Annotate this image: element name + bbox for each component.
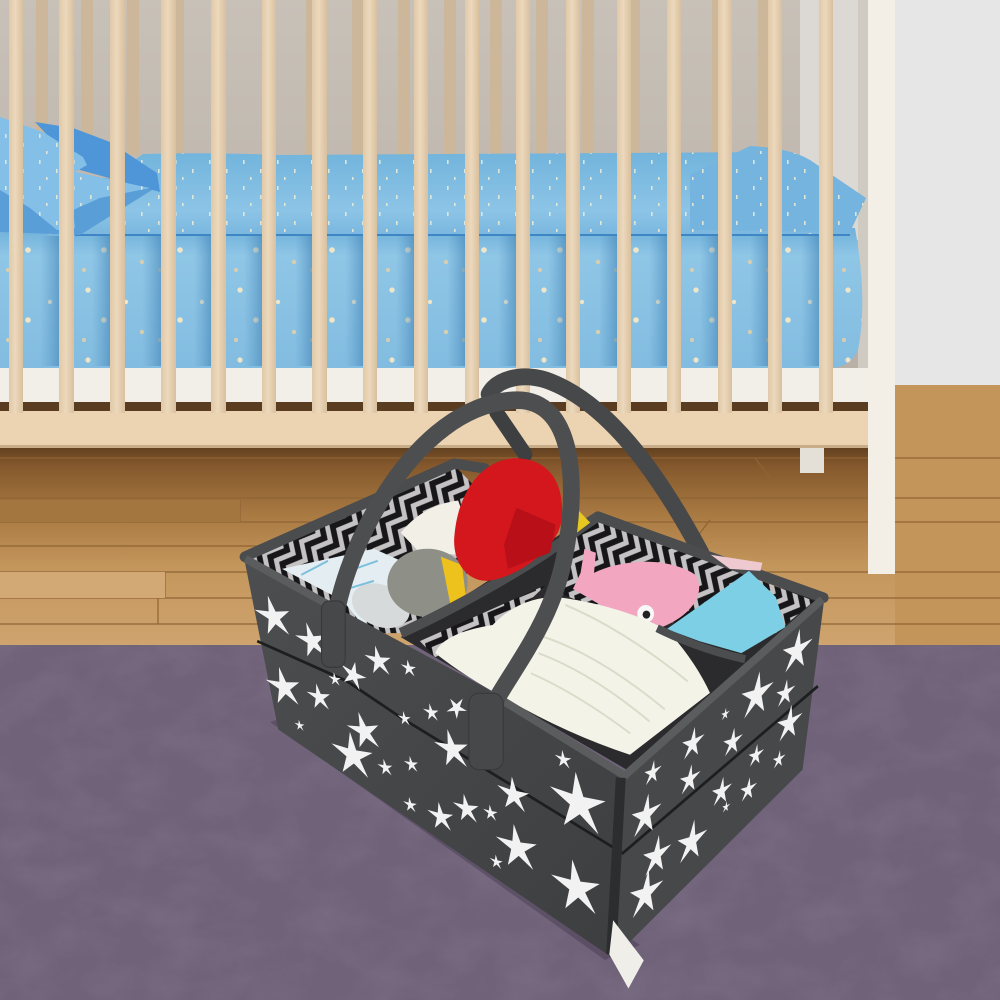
diaper stack [435,597,710,755]
blue wipes package [667,571,785,653]
rolled cloth [401,501,477,557]
pocket seams [257,641,818,853]
rug [0,645,1000,1000]
right face [613,598,824,958]
folded wipes left [282,549,401,625]
wooden floor [0,385,1000,647]
stars left face [250,595,609,916]
hang tag [609,920,644,989]
red plush toy [454,458,590,581]
back handle [489,377,701,553]
storage basket [244,377,824,989]
center divider [401,517,598,633]
front handle [322,400,571,770]
background wall [0,0,1000,460]
pink box behind [711,555,762,571]
mattress fold shadows [40,236,819,366]
pink plush toy [573,549,699,629]
partial star beside handle foot [443,692,471,721]
crib end panel [800,0,895,574]
crib rails [0,368,868,448]
rim back [245,464,824,598]
basket interior lining [250,465,820,770]
left face [244,557,625,958]
crib back bars [36,0,770,155]
pillows [0,117,866,235]
stars right face [627,623,814,920]
blanket [73,152,866,236]
crib front bars [9,0,833,413]
grey plush toy [387,549,468,617]
bottle [346,575,416,636]
basket shadow [270,712,640,960]
mattress [0,228,862,368]
short divider [657,628,745,659]
rim front [245,559,822,776]
